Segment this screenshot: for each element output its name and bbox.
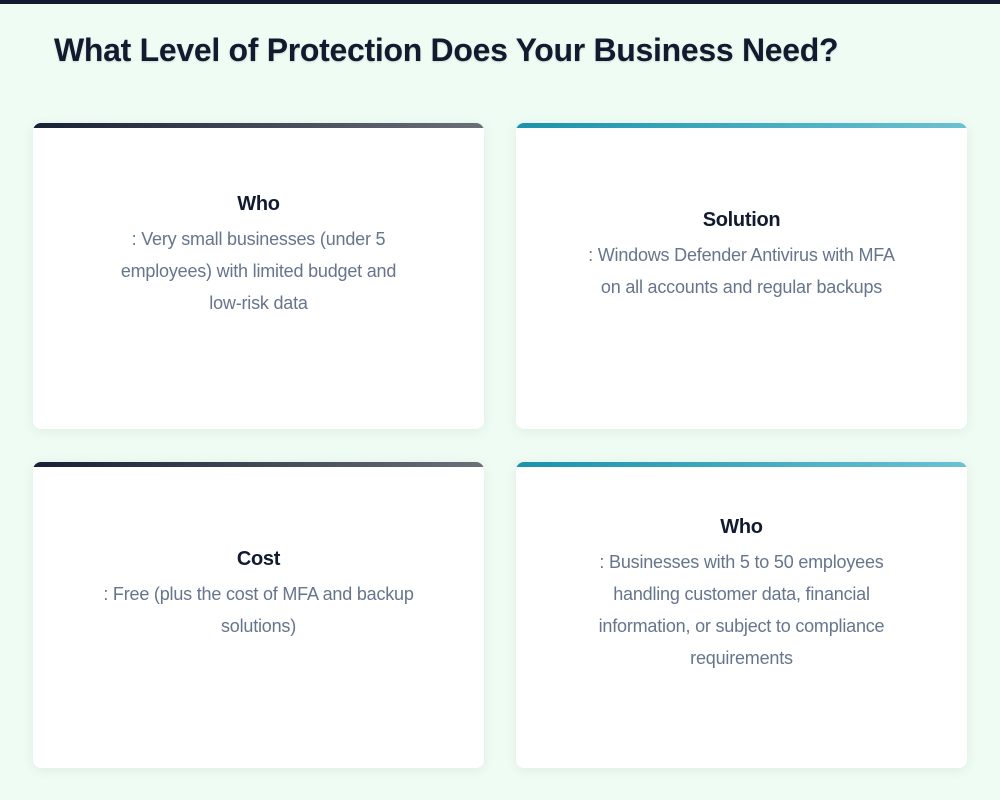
text block: solution: : Windows Defender Antivirus with MFA xyxy=(588,245,895,265)
title: What Level of Protection Does Your Business Need? xyxy=(54,32,838,68)
text block: who: low-risk data xyxy=(209,293,308,313)
text block: cost: Cost xyxy=(237,548,280,570)
text block: who medium: information, or subject to compliance xyxy=(599,616,884,636)
panel: solution xyxy=(516,123,967,429)
text block: cost: solutions) xyxy=(221,616,296,636)
text block: who: employees) with limited budget and xyxy=(121,261,396,281)
text block: who medium: : Businesses with 5 to 50 employees xyxy=(599,552,884,572)
text block: who: Who xyxy=(237,193,280,215)
text block: solution: Solution xyxy=(703,209,780,231)
text block: who xyxy=(121,193,396,313)
text block: who medium: requirements xyxy=(690,648,793,668)
text block: who medium xyxy=(599,516,884,668)
text block: solution xyxy=(588,209,895,297)
panel: who small xyxy=(33,123,484,429)
text block: solution: on all accounts and regular backups xyxy=(601,277,882,297)
panel: who medium xyxy=(516,462,967,768)
text block: who: : Very small businesses (under 5 xyxy=(132,229,385,249)
panel: cost xyxy=(33,462,484,768)
text block: who medium: Who xyxy=(720,516,763,538)
text block: cost: : Free (plus the cost of MFA and backup xyxy=(103,584,414,604)
text block: who medium: handling customer data, financial xyxy=(613,584,870,604)
text block: cost xyxy=(103,548,414,636)
